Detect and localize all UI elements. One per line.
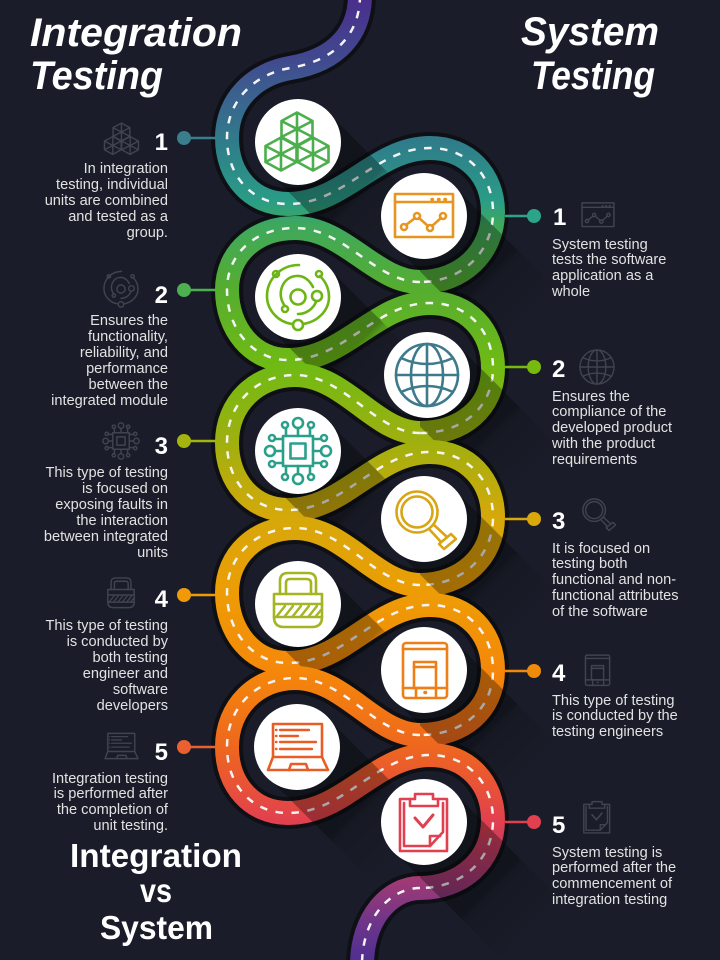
- text block: testing both: [552, 556, 627, 572]
- panel: system point 2: [505, 350, 672, 468]
- title: Integration vs System: [70, 837, 242, 946]
- text block: application as a: [552, 268, 654, 284]
- road segment 3: [227, 375, 560, 655]
- text block: This type of testing: [46, 618, 168, 634]
- number 3: 3: [552, 508, 565, 535]
- text block: whole: [551, 284, 590, 300]
- number 2: 2: [552, 356, 565, 383]
- badge: magnifier icon: [381, 476, 467, 562]
- road segment 5: [227, 678, 567, 960]
- badge: cubes icon: [255, 99, 341, 185]
- icon: globe: [580, 350, 614, 384]
- panel: integration point 5: [52, 733, 216, 834]
- number 3: 3: [155, 433, 168, 460]
- icon: tablet: [585, 655, 610, 685]
- icon: laptop: [105, 733, 138, 759]
- number 5: 5: [552, 812, 565, 839]
- badge: chart window icon: [381, 173, 467, 259]
- panel: integration point 4: [46, 578, 216, 714]
- text block: Ensures the: [552, 389, 630, 405]
- connector: [177, 283, 216, 297]
- road tail: [362, 888, 420, 960]
- badge: globe icon: [384, 332, 470, 418]
- text block: between integrated: [44, 529, 168, 545]
- panel: integration point 2: [51, 271, 216, 409]
- panel: system point 5: [505, 802, 676, 908]
- text block: reliability, and: [80, 345, 168, 361]
- text block: units are combined: [45, 193, 168, 209]
- connector: [505, 664, 541, 678]
- panel: integration point 3: [44, 423, 216, 561]
- icon: clipboard: [584, 802, 610, 833]
- text block: performed after the: [552, 860, 676, 876]
- number 4: 4: [155, 586, 169, 613]
- text block: Ensures the: [90, 313, 168, 329]
- text block: In integration: [84, 161, 168, 177]
- text block: exposing faults in: [55, 497, 168, 513]
- connector: [177, 131, 216, 145]
- panel: system point 3: [505, 499, 679, 620]
- text block: is conducted by the: [552, 708, 678, 724]
- number 4: 4: [552, 660, 566, 687]
- text block: integrated module: [51, 393, 168, 409]
- text block: the interaction: [76, 513, 168, 529]
- text block: testing engineers: [552, 724, 663, 740]
- icon: cubes: [104, 123, 138, 154]
- text block: testing, individual: [56, 177, 168, 193]
- title: Integration vs System: System: [100, 909, 213, 946]
- text block: is performed after: [54, 786, 168, 802]
- text block: Integration testing: [52, 771, 168, 787]
- title: Integration Testing: [30, 11, 242, 98]
- title: System Testing: System: [521, 10, 659, 54]
- title: System Testing: [521, 10, 659, 98]
- text block: functional attributes: [552, 588, 679, 604]
- icon: chart window: [582, 203, 614, 227]
- text block: the completion of: [57, 802, 169, 818]
- text block: between the: [88, 377, 168, 393]
- text block: developed product: [552, 420, 672, 436]
- text block: System testing is: [552, 845, 662, 861]
- text block: engineer and: [83, 666, 168, 682]
- title: Integration Testing: Testing: [30, 54, 163, 98]
- badge: lock icon: [255, 561, 341, 647]
- title: Integration vs System: vs: [140, 872, 172, 909]
- connector: [505, 209, 541, 223]
- text block: commencement of: [552, 876, 673, 892]
- title: System Testing: Testing: [531, 54, 655, 98]
- connector: [505, 360, 541, 374]
- text block: units: [137, 545, 168, 561]
- connector: [505, 815, 541, 829]
- text block: software: [113, 682, 168, 698]
- text block: This type of testing: [46, 465, 168, 481]
- text block: unit testing.: [93, 818, 168, 834]
- text block: This type of testing: [552, 693, 674, 709]
- road outline: [227, 0, 493, 960]
- number 1: 1: [155, 129, 168, 156]
- panel: integration point 1: [45, 123, 216, 241]
- badge: clipboard icon: [381, 779, 467, 865]
- badge: laptop icon: [254, 704, 340, 790]
- text block: is focused on: [82, 481, 168, 497]
- panel: system point 4: [505, 655, 678, 740]
- badge: chip icon: [255, 408, 341, 494]
- number 2: 2: [155, 282, 168, 309]
- text block: both testing: [93, 650, 168, 666]
- number 5: 5: [155, 739, 168, 766]
- badge: tablet icon: [381, 627, 467, 713]
- text block: functionality,: [88, 329, 168, 345]
- text block: functional and non-: [552, 572, 676, 588]
- text block: developers: [97, 698, 168, 714]
- connector: [177, 434, 216, 448]
- text block: with the product: [551, 436, 655, 452]
- road segment 4: [227, 528, 560, 806]
- icon: lock: [108, 578, 134, 608]
- badge: orbit icon: [255, 254, 341, 340]
- title: Integration vs System: Integration: [70, 837, 242, 874]
- road segment 2: [227, 228, 562, 509]
- connector: [505, 512, 541, 526]
- text block: System testing: [552, 237, 648, 253]
- text block: requirements: [552, 452, 637, 468]
- text block: tests the software: [552, 252, 666, 268]
- panel: system point 1: [505, 203, 666, 300]
- text block: group.: [127, 225, 168, 241]
- text block: performance: [86, 361, 168, 377]
- connector: [177, 588, 216, 602]
- icon: magnifier: [583, 499, 616, 530]
- text block: integration testing: [552, 892, 667, 908]
- text block: is conducted by: [67, 634, 169, 650]
- icon: chip: [103, 423, 139, 459]
- number 1: 1: [553, 204, 566, 231]
- text block: It is focused on: [552, 541, 650, 557]
- text block: of the software: [552, 604, 648, 620]
- text block: compliance of the: [552, 404, 666, 420]
- text block: and tested as a: [68, 209, 169, 225]
- road segment 1: [227, 0, 560, 352]
- icon: orbit: [104, 271, 138, 307]
- title: Integration Testing: Integration: [30, 11, 242, 55]
- connector: [177, 740, 216, 754]
